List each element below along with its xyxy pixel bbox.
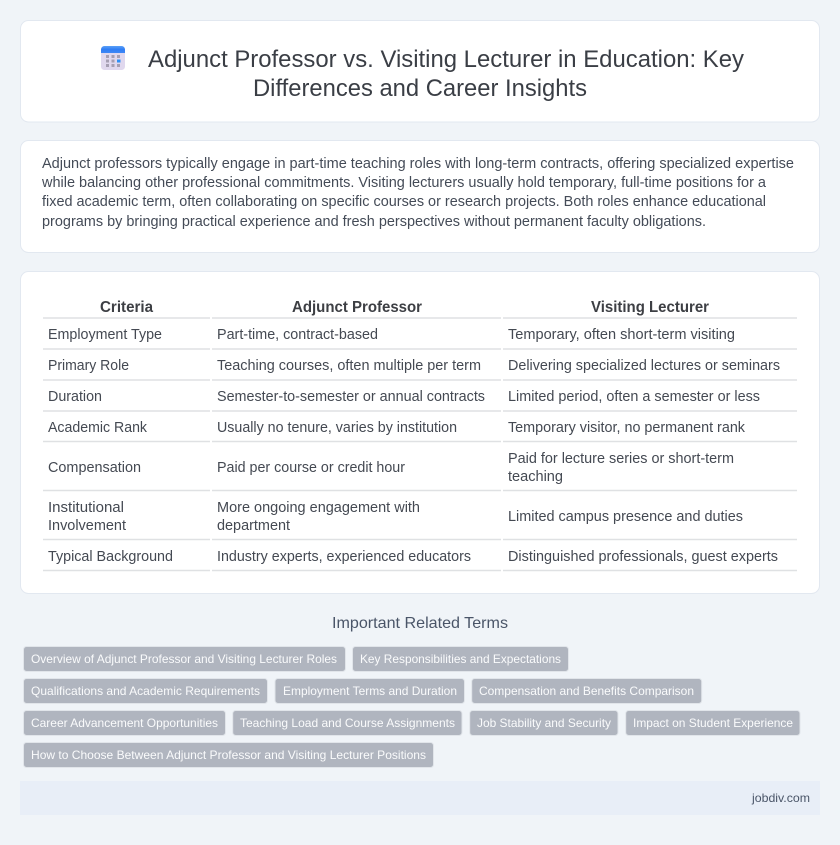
tag: student experience <box>626 710 800 736</box>
table row: typical background: Industry experts, experienced educators <box>217 549 471 565</box>
tag: how to choose <box>24 742 434 768</box>
title <box>148 46 744 102</box>
table row: compensation <box>48 451 734 485</box>
table row: academic rank <box>48 420 746 436</box>
footer: jobdiv.com <box>751 791 810 805</box>
table row: academic rank: Usually no tenure, varies by institution <box>217 420 457 436</box>
table row: typical background <box>48 549 778 565</box>
text block: introduction paragraph <box>41 156 794 230</box>
table header row: Visiting Lecturer <box>591 299 709 316</box>
tag: job stability: Job Stability and Security <box>477 716 611 730</box>
table row: employment type: Temporary, often short-term visiting <box>508 327 735 343</box>
tag: how to choose: How to Choose Between Adjunct Professor and Visiting Lecturer Positions <box>31 748 426 762</box>
tag: teaching load <box>233 710 462 736</box>
table row: duration: Semester-to-semester or annual contracts <box>217 389 485 405</box>
tag: qualifications <box>24 678 268 704</box>
table row: compensation: Compensation <box>48 460 141 476</box>
panel: comparison table <box>20 272 820 594</box>
table row: primary role <box>48 358 780 374</box>
tag: job stability <box>470 710 618 736</box>
table row: institutional involvement <box>48 500 743 534</box>
footer <box>20 781 820 815</box>
table row: compensation: Paid per course or credit hour <box>217 460 405 476</box>
tag: teaching load: Teaching Load and Course Assignments <box>240 716 455 730</box>
tag: responsibilities <box>352 646 568 672</box>
text block: introduction paragraph: while balancing other professional commitments. Visiting lecturers usually hold temporary, full-time positions for a <box>41 175 766 191</box>
table row: compensation: Paid for lecture series or short-term <box>508 451 734 467</box>
table row: employment type: Employment Type <box>48 327 162 343</box>
text block: introduction paragraph: fixed academic term, often collaborating on specific courses or research projects. Both roles enhance educational <box>42 194 766 210</box>
table row: academic rank: Temporary visitor, no permanent rank <box>508 420 746 436</box>
title: Adjunct Professor vs. Visiting Lecturer in Education: Key <box>148 46 744 73</box>
tag: career advancement: Career Advancement Opportunities <box>31 716 218 730</box>
text block: introduction paragraph: Adjunct professors typically engage in part-time teaching roles with long-term contracts, offering specialized expertise <box>42 156 794 172</box>
tag: career advancement <box>24 710 226 736</box>
table row: academic rank: Academic Rank <box>48 420 148 436</box>
table row: typical background: Typical Background <box>48 549 173 565</box>
table row: institutional involvement: Limited campus presence and duties <box>508 509 743 525</box>
table row: institutional involvement: Involvement <box>48 518 126 534</box>
tag: employment terms <box>275 678 464 704</box>
table row: primary role: Delivering specialized lectures or seminars <box>508 358 780 374</box>
icon: calendar <box>101 46 125 70</box>
tag: responsibilities: Key Responsibilities and Expectations <box>360 652 561 666</box>
table row: primary role: Primary Role <box>48 358 129 374</box>
related term tags <box>24 646 800 768</box>
table row: employment type <box>48 327 735 343</box>
tag: compensation <box>472 678 702 704</box>
table row: institutional involvement: department <box>217 518 290 534</box>
panel: introduction <box>20 140 820 252</box>
table row: institutional involvement: More ongoing engagement with <box>217 500 420 516</box>
table row: primary role: Teaching courses, often multiple per term <box>217 358 481 374</box>
text block: introduction paragraph: programs by bringing practical experience and fresh perspectives without permanent faculty obligations. <box>42 214 706 230</box>
table row: duration: Limited period, often a semester or less <box>508 389 760 405</box>
table row: typical background: Distinguished professionals, guest experts <box>508 549 778 565</box>
table header row: Adjunct Professor <box>292 299 422 316</box>
table header row <box>100 299 709 316</box>
panel: header <box>20 20 820 122</box>
tag: overview: Overview of Adjunct Professor and Visiting Lecturer Roles <box>31 652 337 666</box>
table row: employment type: Part-time, contract-based <box>217 327 378 343</box>
heading: important related terms: Important Related Terms <box>332 615 508 632</box>
tag: qualifications: Qualifications and Academic Requirements <box>31 684 260 698</box>
tag: employment terms: Employment Terms and Duration <box>283 684 457 698</box>
table header row: Criteria <box>100 299 153 316</box>
title: Differences and Career Insights <box>253 75 587 102</box>
tag: student experience: Impact on Student Experience <box>633 716 793 730</box>
table row: compensation: teaching <box>508 469 563 485</box>
table row: duration <box>48 389 760 405</box>
tag: overview <box>24 646 346 672</box>
table row: institutional involvement: Institutional <box>48 500 124 516</box>
tag: compensation: Compensation and Benefits Comparison <box>479 684 694 698</box>
table row: duration: Duration <box>48 389 102 405</box>
